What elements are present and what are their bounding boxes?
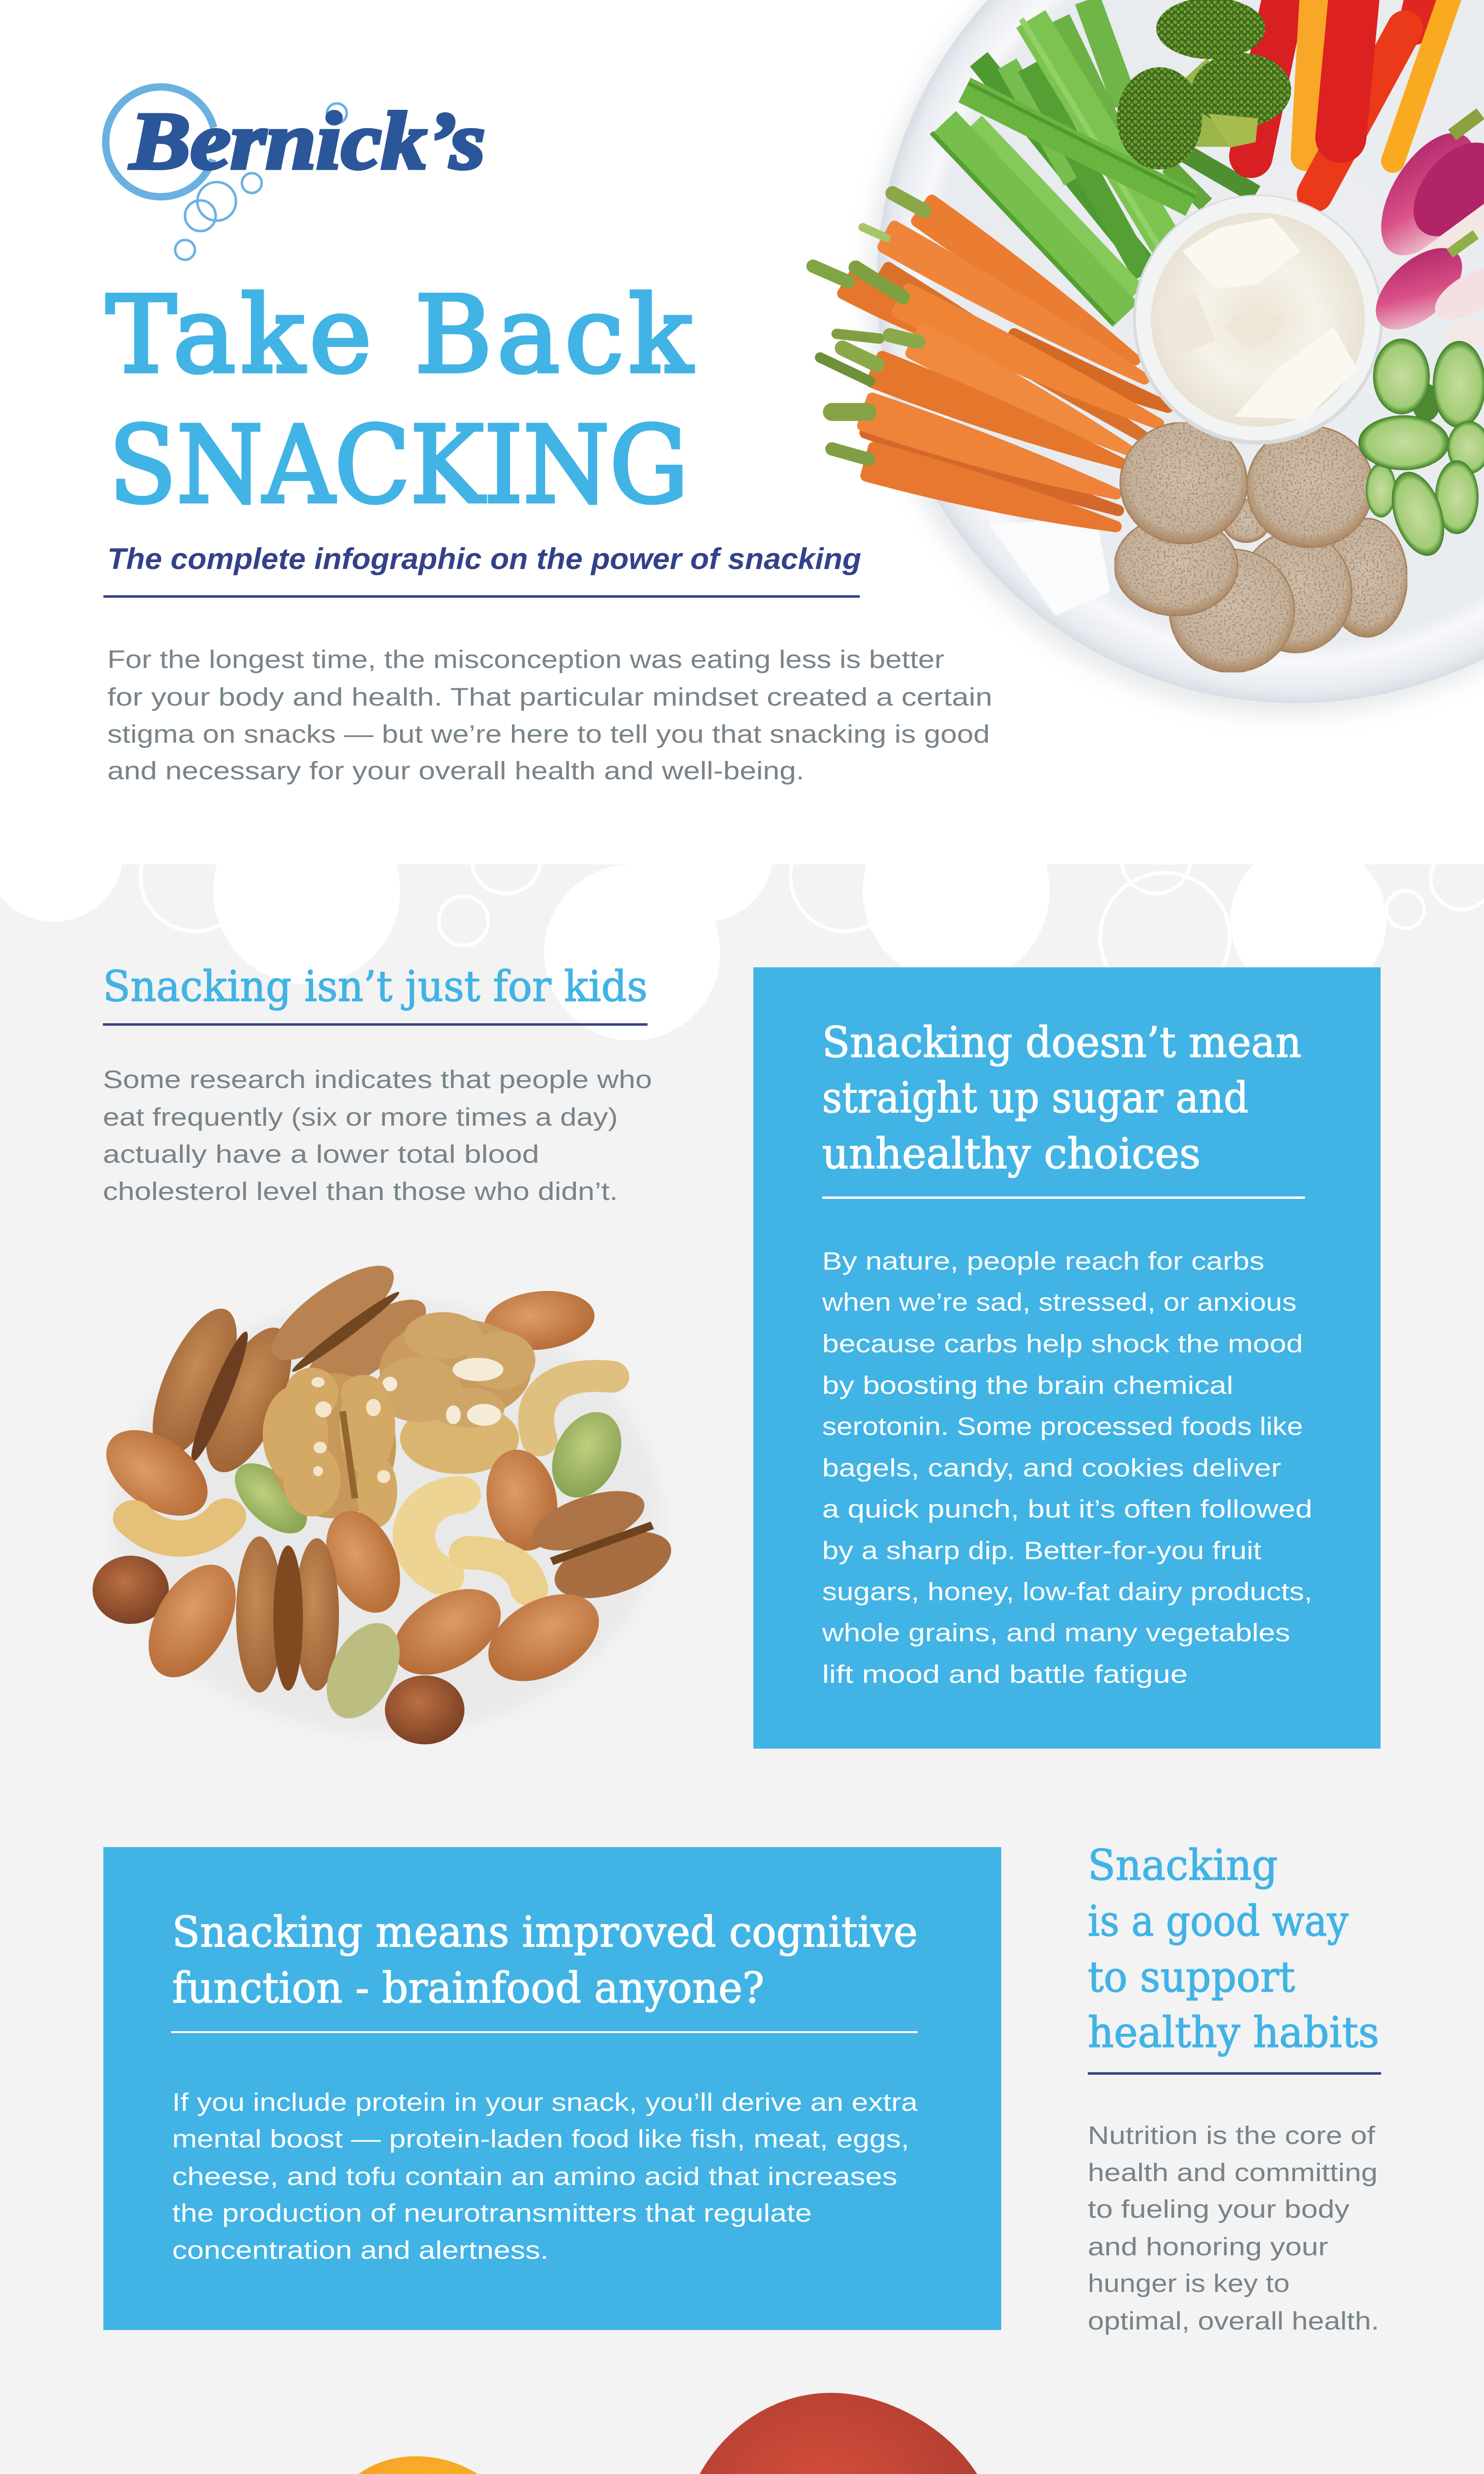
photo: mixed nuts bbox=[88, 1251, 682, 1744]
walnut, large bbox=[263, 1368, 397, 1527]
body text: the production of neurotransmitters that regulate bbox=[172, 2199, 812, 2227]
photo: assorted fruit bbox=[107, 2393, 1382, 2474]
hazelnut, bottom bbox=[385, 1675, 464, 1744]
cucumbers bbox=[1358, 338, 1484, 563]
body text: when we’re sad, stressed, or anxious bbox=[822, 1288, 1297, 1316]
radishes bbox=[1361, 114, 1484, 346]
body text: sugars, honey, low-fat dairy products, bbox=[822, 1577, 1312, 1606]
hazelnut, left bbox=[93, 1556, 169, 1624]
bell pepper strips bbox=[1251, 0, 1452, 194]
intro text: and necessary for your overall health and well-being. bbox=[107, 757, 804, 785]
nuts shadow bbox=[111, 1299, 660, 1734]
almond, bottom middle bbox=[375, 1571, 519, 1692]
section: good way to support healthy habits bbox=[1088, 1841, 1381, 2335]
section: snacking isn't just for kids bbox=[103, 962, 652, 1205]
heading bbox=[172, 1908, 918, 2013]
almond, bottom right bbox=[470, 1576, 617, 1699]
almond, mid bbox=[313, 1503, 414, 1621]
celery sticks bbox=[931, 0, 1255, 325]
heading: unhealthy choices bbox=[822, 1130, 1201, 1179]
plate bbox=[877, 0, 1484, 703]
body text: a quick punch, but it’s often followed bbox=[822, 1495, 1312, 1523]
intro text: stigma on snacks — but we’re here to tell you that snacking is good bbox=[107, 720, 990, 748]
plate shadow bbox=[868, 0, 1484, 715]
heading: Snacking means improved cognitive bbox=[172, 1908, 918, 1957]
body background bbox=[0, 864, 1484, 2474]
body text: By nature, people reach for carbs bbox=[822, 1247, 1264, 1275]
almond, bottom left bbox=[131, 1553, 253, 1689]
title: SNACKING bbox=[109, 404, 689, 527]
pecan, bottom bbox=[236, 1536, 339, 1693]
peach bbox=[681, 2393, 995, 2474]
heading: to support bbox=[1088, 1953, 1295, 2002]
body text bbox=[1088, 2121, 1379, 2335]
carrot tops bbox=[813, 193, 924, 459]
body text: eat frequently (six or more times a day) bbox=[103, 1103, 618, 1131]
subtitle: The complete infographic on the power of snacking bbox=[107, 542, 861, 575]
almond, left bbox=[88, 1414, 226, 1532]
cashew, right bbox=[536, 1376, 611, 1440]
body text: concentration and alertness. bbox=[172, 2236, 549, 2264]
body text: lift mood and battle fatigue bbox=[822, 1660, 1188, 1688]
heading bbox=[1088, 1841, 1379, 2057]
body text: to fueling your body bbox=[1088, 2195, 1350, 2223]
carrots bbox=[843, 200, 1168, 526]
intro text: For the longest time, the misconception was eating less is better bbox=[107, 645, 944, 673]
body text: by boosting the brain chemical bbox=[822, 1371, 1233, 1399]
heading: Snacking doesn’t mean bbox=[822, 1018, 1301, 1067]
pecan, top left bbox=[135, 1300, 310, 1483]
heading: function - brainfood anyone? bbox=[172, 1964, 764, 2013]
body text: Nutrition is the core of bbox=[1088, 2121, 1376, 2149]
body text bbox=[822, 1247, 1312, 1688]
pistachio, bottom bbox=[312, 1614, 414, 1728]
title bbox=[106, 274, 694, 527]
dip bowl bbox=[1133, 194, 1383, 445]
walnut, top bbox=[375, 1312, 535, 1427]
body text: health and committing bbox=[1088, 2158, 1378, 2187]
body text: whole grains, and many vegetables bbox=[822, 1618, 1290, 1647]
title: Take Back bbox=[106, 274, 694, 397]
body text: Some research indicates that people who bbox=[103, 1065, 652, 1094]
panel: snacking doesn't mean sugar bbox=[753, 967, 1381, 1749]
body text: cheese, and tofu contain an amino acid that increases bbox=[172, 2162, 897, 2190]
panel: improved cognitive function bbox=[103, 1847, 1001, 2330]
crackers bbox=[1114, 423, 1407, 672]
photo: vegetable plate with dip bbox=[813, 0, 1484, 715]
pistachio, right bbox=[540, 1403, 634, 1506]
cashew under walnut bbox=[400, 1403, 519, 1474]
header background bbox=[0, 0, 1484, 864]
cashews, centre bbox=[414, 1495, 529, 1589]
body text: bagels, candy, and cookies deliver bbox=[822, 1454, 1281, 1482]
heading: is a good way bbox=[1088, 1897, 1348, 1946]
intro text: for your body and health. That particular mindset created a certain bbox=[107, 683, 992, 711]
pecan, top centre bbox=[257, 1251, 441, 1409]
heading: Snacking bbox=[1088, 1841, 1278, 1890]
pecan, right bbox=[523, 1477, 682, 1612]
heading bbox=[822, 1018, 1301, 1179]
cashew, left bbox=[134, 1517, 226, 1539]
body text: because carbs help shock the mood bbox=[822, 1330, 1303, 1358]
almond, top right bbox=[480, 1285, 599, 1356]
body text: If you include protein in your snack, you’ll derive an extra bbox=[172, 2088, 918, 2116]
logo ring bbox=[106, 87, 214, 197]
pistachio, left bbox=[221, 1452, 321, 1545]
heading: straight up sugar and bbox=[822, 1074, 1249, 1123]
body text: serotonin. Some processed foods like bbox=[822, 1412, 1303, 1440]
plate reflection bbox=[988, 520, 1111, 616]
heading: Snacking isn’t just for kids bbox=[103, 962, 648, 1011]
body text: actually have a lower total blood bbox=[103, 1140, 539, 1168]
logo wordmark: Bernick’s bbox=[129, 95, 485, 186]
heading: healthy habits bbox=[1088, 2008, 1379, 2057]
body text: and honoring your bbox=[1088, 2233, 1328, 2261]
body text: cholesterol level than those who didn’t. bbox=[103, 1177, 618, 1205]
logo bubbles bbox=[175, 103, 347, 260]
body text: optimal, overall health. bbox=[1088, 2307, 1379, 2335]
broccoli bbox=[1117, 0, 1291, 170]
intro text bbox=[107, 645, 992, 785]
body text bbox=[172, 2088, 918, 2264]
apricot, upper bbox=[322, 2456, 528, 2474]
bubble pattern bbox=[0, 783, 1484, 1041]
body text: by a sharp dip. Better-for-you fruit bbox=[822, 1536, 1261, 1565]
body text: hunger is key to bbox=[1088, 2269, 1290, 2297]
logo: Bernick's bbox=[106, 87, 485, 260]
body text: mental boost — protein-laden food like fish, meat, eggs, bbox=[172, 2125, 909, 2153]
body text bbox=[103, 1065, 652, 1205]
almond, mid right bbox=[479, 1445, 564, 1555]
